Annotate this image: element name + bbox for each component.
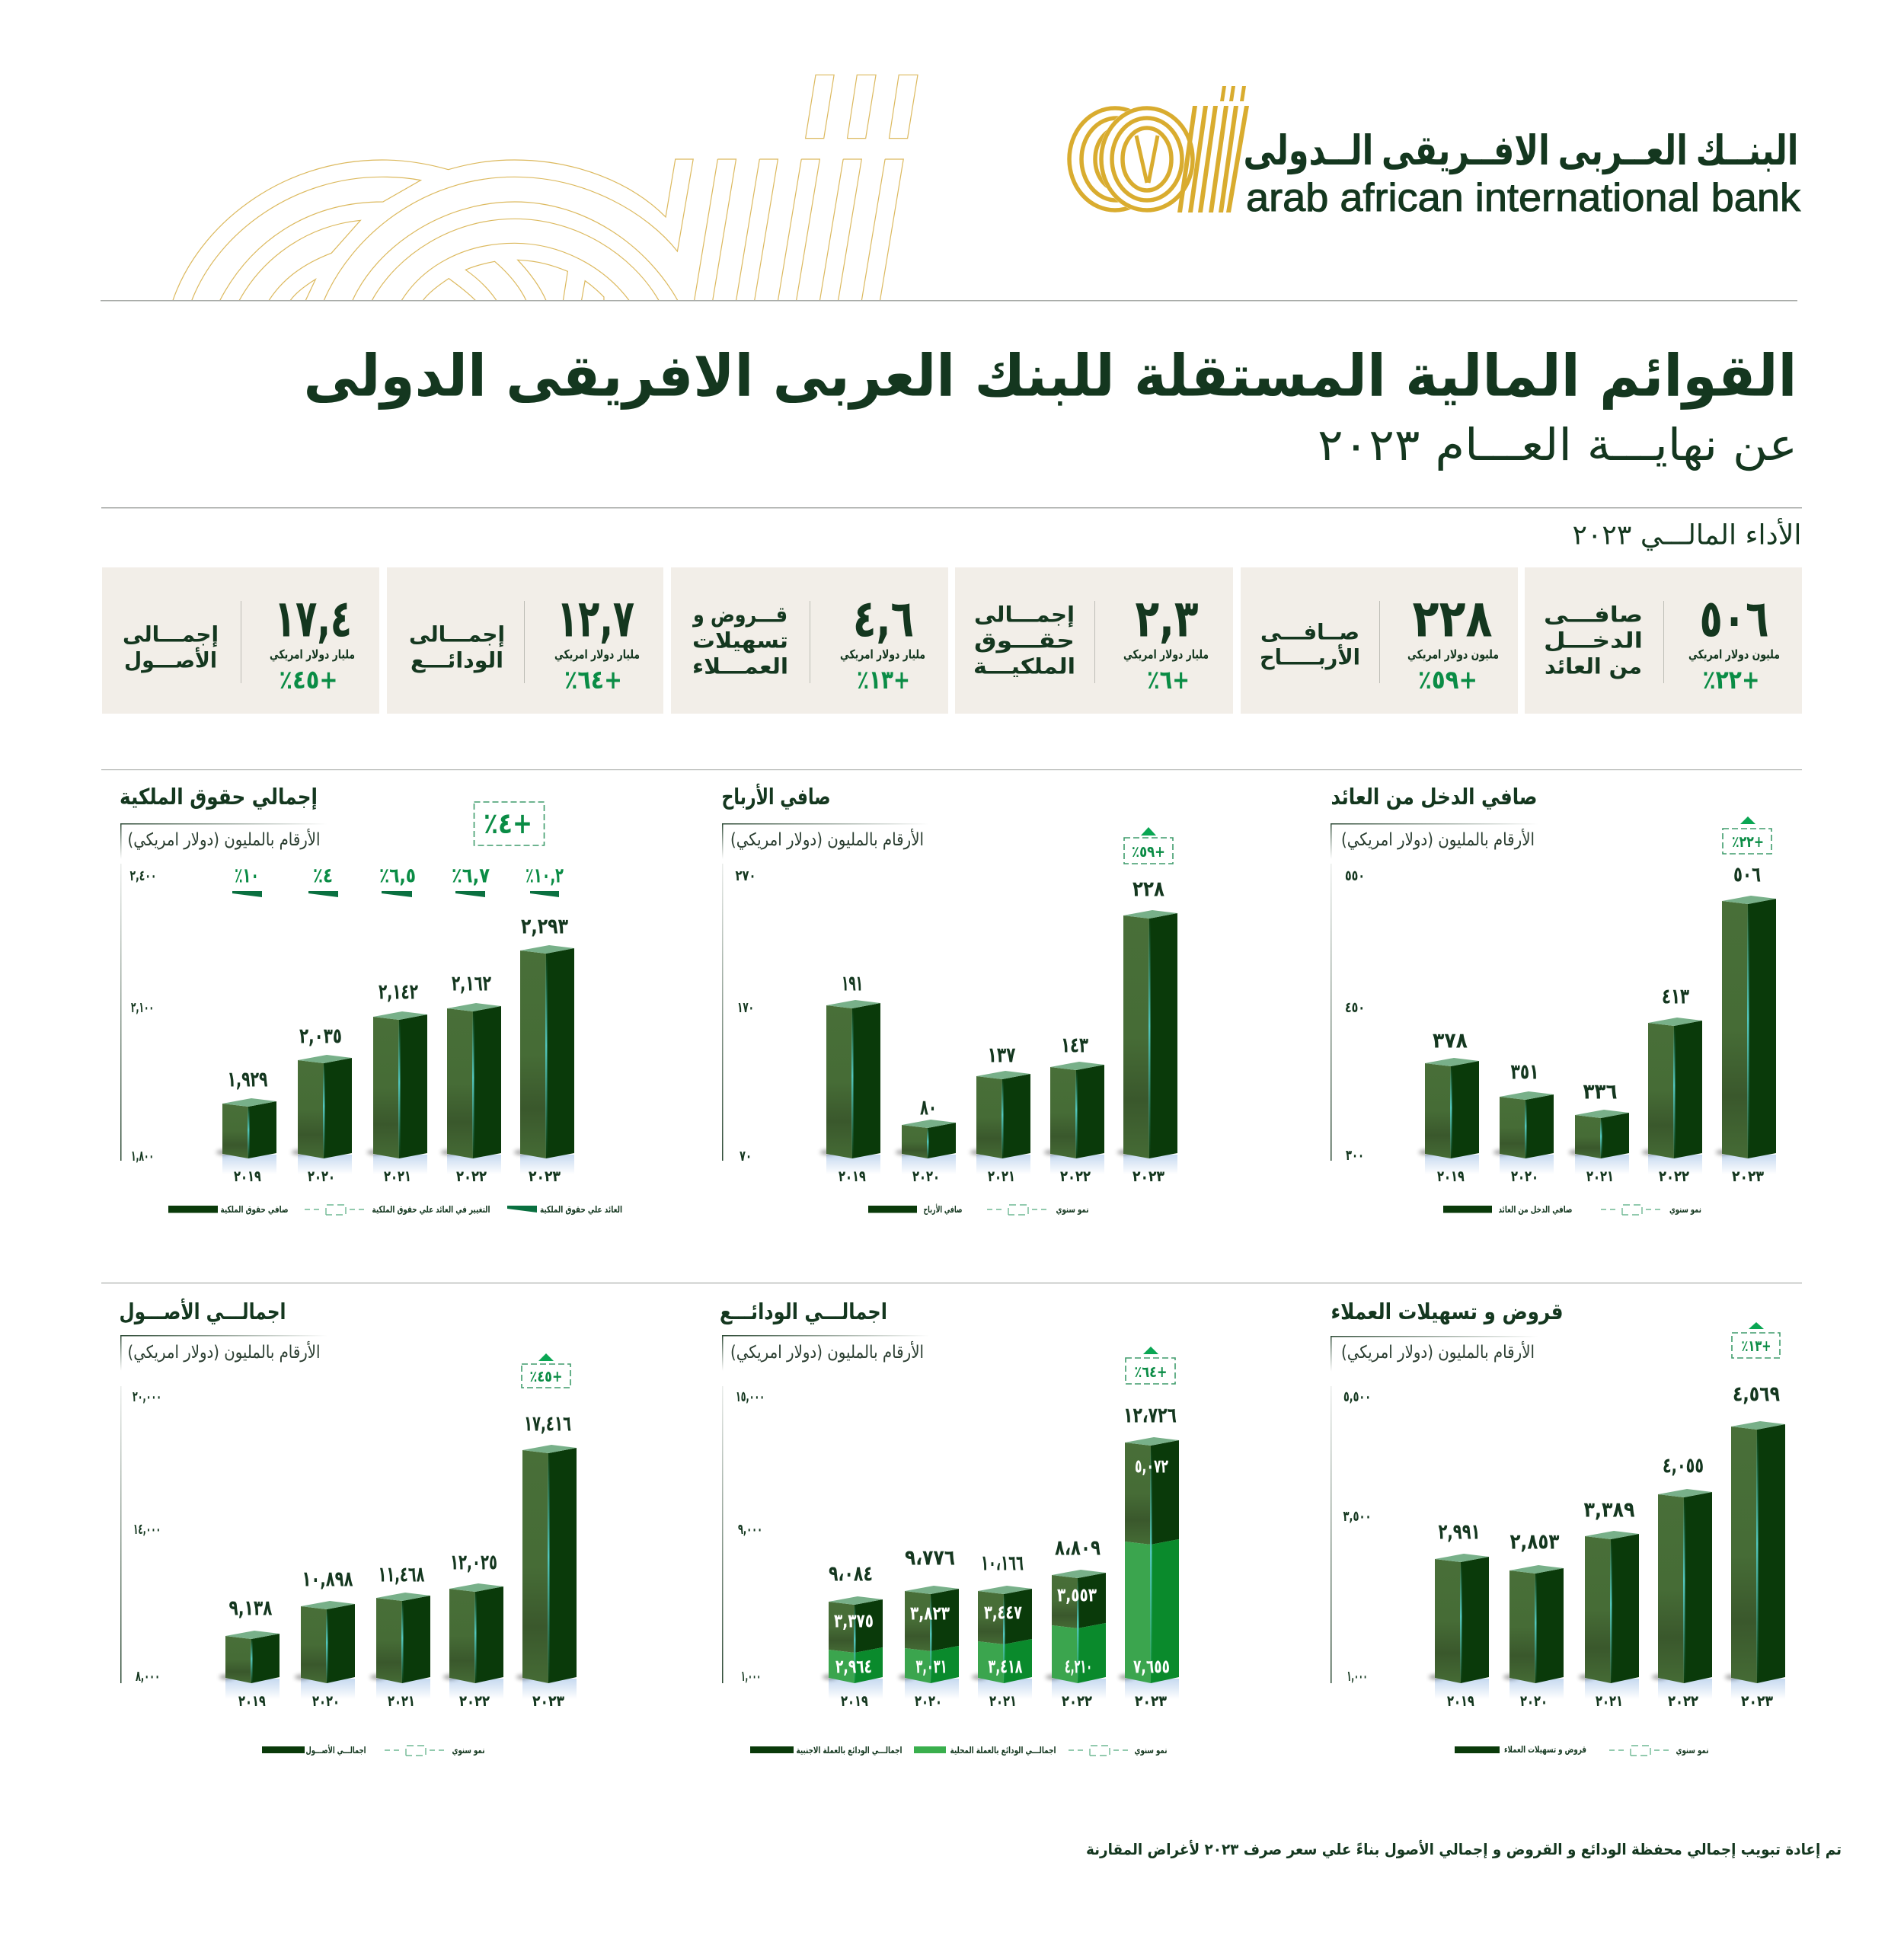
- value labels: ١٢,٠٢٥: [450, 1549, 497, 1575]
- year labels: [238, 1696, 564, 1706]
- growth callout: [522, 1353, 570, 1388]
- bars: [1429, 1421, 1785, 1699]
- year labels: ٢٠٢٢: [1060, 1168, 1091, 1187]
- legend: قروض و تسهيلات العملاء: [1504, 1744, 1586, 1756]
- value labels: ٤١٣: [1662, 984, 1689, 1008]
- year labels: ٢٠٢١: [1586, 1168, 1614, 1187]
- foreign currency value labels: ٣,٤٤٧: [984, 1601, 1022, 1624]
- kpi card: total deposits: [387, 567, 663, 714]
- y axis labels: ٥٥٠: [1345, 867, 1365, 884]
- local currency value labels: [835, 1656, 1170, 1677]
- growth callout: +٤٥٪: [530, 1367, 562, 1385]
- value labels: [842, 876, 1164, 1120]
- kpi card: customer loans: مليار دولار امريكي: [840, 647, 925, 663]
- legend: [262, 1744, 484, 1756]
- local currency value labels: ٣,٠٣١: [915, 1656, 947, 1677]
- year labels: ٢٠٢١: [388, 1692, 415, 1712]
- y axis labels: [129, 867, 157, 1165]
- kpi card: net profit: مليون دولار امريكي: [1407, 647, 1499, 663]
- value labels: ٤,٥٦٩: [1733, 1382, 1780, 1406]
- year labels: ٢٠٢٠: [912, 1168, 940, 1187]
- subtitle: عن نهايـــة العـــام ٢٠٢٣: [1318, 419, 1797, 471]
- panel: total deposits chart: [720, 1299, 1179, 1756]
- kpi card: customer loans: العمـــلاء: [692, 653, 788, 679]
- growth callout: [1126, 1347, 1175, 1384]
- year labels: ٢٠١٩: [841, 1692, 868, 1712]
- kpi card: net interest income: مليون دولار امريكي: [1688, 647, 1780, 663]
- year labels: ٢٠٢١: [1596, 1692, 1623, 1712]
- value labels: ٤,٠٥٥: [1663, 1453, 1704, 1478]
- unit note: الأرقام بالمليون (دولار امريكي): [128, 1341, 320, 1363]
- year labels: ٢٠٢٠: [1511, 1168, 1538, 1187]
- y axis labels: ١٧٠: [737, 999, 754, 1016]
- legend: نمو سنوي: [1676, 1745, 1709, 1756]
- chart frame: [1331, 823, 1538, 1161]
- kpi card: total equity: [955, 567, 1233, 714]
- value labels: ٣٥١: [1511, 1059, 1538, 1085]
- year labels: ٢٠١٩: [234, 1168, 261, 1187]
- kpi card: total equity: إجمـــالى: [974, 602, 1075, 628]
- y axis labels: ١٥,٠٠٠: [736, 1388, 765, 1405]
- total value labels: ٩،٠٨٤: [829, 1561, 873, 1586]
- unit note: الأرقام بالمليون (دولار امريكي): [128, 829, 320, 850]
- value labels: ٥٠٦: [1733, 862, 1761, 887]
- chart frame: [722, 823, 929, 1161]
- legend: نمو سنوي: [452, 1745, 484, 1756]
- year labels: ٢٠٢١: [988, 1168, 1015, 1187]
- value labels: [1438, 1382, 1780, 1554]
- legend: صافي الأرباح: [923, 1203, 963, 1215]
- panel: total assets chart: [119, 1298, 577, 1756]
- y axis labels: ١٤,٠٠٠: [133, 1521, 161, 1538]
- return on equity row: ١٠٪: [235, 864, 259, 888]
- logo mark: [1069, 86, 1249, 212]
- kpi card: customer loans: قـــروض و: [692, 602, 787, 628]
- value labels: ٩,١٣٨: [228, 1595, 273, 1621]
- bars: [216, 945, 574, 1174]
- y axis labels: [133, 1388, 161, 1685]
- value labels: ١٤٣: [1061, 1033, 1088, 1057]
- year labels: [1447, 1696, 1773, 1706]
- kpi card: total deposits: إجمـــالى: [409, 621, 505, 647]
- y axis labels: [1343, 1388, 1371, 1685]
- y axis labels: ٢,٤٠٠: [129, 867, 157, 884]
- value labels: ٢,٢٩٣: [521, 914, 568, 938]
- return on equity row: ٦,٥٪: [379, 864, 416, 888]
- growth callout: [1723, 816, 1771, 854]
- growth callout: +١٣٪: [1741, 1337, 1771, 1355]
- value labels: ١,٩٢٩: [227, 1066, 268, 1092]
- panel: kpi cards: [102, 567, 1802, 714]
- year labels: ٢٠٢٣: [1732, 1168, 1764, 1187]
- kpi card: total assets: ١٧,٤: [274, 589, 352, 649]
- kpi card: net interest income: [1525, 567, 1802, 714]
- year labels: ٢٠٢٠: [1520, 1692, 1548, 1712]
- unit note: الأرقام بالمليون (دولار امريكي): [1341, 829, 1535, 850]
- kpi card: customer loans: +١٣٪: [857, 665, 910, 695]
- chart title: قروض و تسهيلات العملاء: [1331, 1299, 1563, 1324]
- total value labels: [829, 1403, 1177, 1586]
- value labels: ٢,١٤٢: [379, 979, 418, 1004]
- chart frame: [1331, 1336, 1538, 1683]
- kpi card: customer loans: تسهيلات: [692, 628, 788, 653]
- kpi card: total equity: حقـــوق: [974, 628, 1075, 653]
- footnote: تم إعادة تبويب إجمالي محفظة الودائع و القروض و إجمالي الأصول بناءً علي سعر صرف ٢٠٢٣ لأغراض المقارنة: [1086, 1839, 1842, 1859]
- kpi card: total deposits: الودائـــع: [411, 647, 503, 673]
- kpi card: total equity: ٢,٣: [1135, 589, 1199, 649]
- growth callout: [1732, 1322, 1780, 1358]
- year labels: ٢٠٢٢: [456, 1168, 487, 1187]
- total value labels: ٩،٧٧٦: [905, 1545, 955, 1570]
- growth callout: +٢٢٪: [1732, 832, 1764, 851]
- year labels: ٢٠٢١: [989, 1692, 1017, 1712]
- section heading: financial performance: الأداء المالـــي ٢٠٢٣: [1572, 518, 1802, 551]
- year labels: [839, 1171, 1164, 1181]
- legend: التغيير في العائد علي حقوق الملكية: [372, 1204, 490, 1216]
- chart title: صافي الأرباح: [722, 783, 830, 810]
- kpi card: total deposits: ١٢,٧: [557, 589, 634, 649]
- logo: [1069, 86, 1801, 220]
- foreign currency value labels: ٣,٨٢٣: [910, 1602, 950, 1624]
- legend: [868, 1203, 1089, 1216]
- y axis labels: ٨,٠٠٠: [136, 1668, 160, 1685]
- value labels: [227, 914, 568, 1092]
- legend: نمو سنوي: [1056, 1204, 1089, 1216]
- legend: [1443, 1204, 1701, 1216]
- legend: [168, 1204, 622, 1216]
- kpi card: total equity: مليار دولار امريكي: [1123, 647, 1209, 663]
- growth callout: [1124, 827, 1173, 864]
- local currency value labels: ٢,٩٦٤: [835, 1656, 872, 1677]
- legend: اجمالـــي الودائع بالعملة الاجنبية: [797, 1745, 902, 1756]
- value labels: ٢,٩٩١: [1438, 1519, 1481, 1545]
- y axis labels: ٢٧٠: [736, 867, 756, 884]
- chart title: اجمالـــي الودائـــع: [720, 1299, 887, 1324]
- foreign currency value labels: [834, 1455, 1168, 1631]
- y axis labels: ٥,٥٠٠: [1343, 1388, 1371, 1405]
- year labels: ٢٠١٩: [238, 1692, 266, 1712]
- kpi card: net profit: ٢٢٨: [1412, 589, 1493, 649]
- y axis labels: ٧٠: [740, 1148, 752, 1165]
- y axis labels: ١,٠٠٠: [1347, 1668, 1368, 1685]
- kpi card: total assets: إجمـــالى: [123, 621, 219, 647]
- year labels: ٢٠٢٠: [915, 1692, 942, 1712]
- year labels: ٢٠٢٢: [1659, 1168, 1689, 1187]
- year labels: ٢٠٢٣: [1741, 1692, 1773, 1712]
- total value labels: ١٢،٧٢٦: [1123, 1403, 1177, 1427]
- chart frame: [120, 1335, 327, 1683]
- logo english name: arab african international bank: [1246, 176, 1801, 220]
- legend: [1455, 1744, 1709, 1756]
- kpi card: total assets: مليار دولار امريكي: [270, 647, 355, 663]
- kpi card: net interest income: من العائد: [1545, 653, 1642, 679]
- return on equity row: ١٠,٢٪: [526, 864, 564, 888]
- value labels: ١٠,٨٩٨: [302, 1566, 353, 1592]
- value labels: [228, 1411, 571, 1621]
- kpi card: total assets: +٤٥٪: [279, 665, 338, 695]
- return on equity row: ٤٪: [313, 864, 333, 888]
- year labels: ٢٠٢٠: [308, 1168, 335, 1187]
- kpi card: customer loans: [671, 567, 948, 714]
- value labels: ٣٣٦: [1583, 1078, 1618, 1104]
- value labels: ١٧,٤١٦: [524, 1411, 571, 1436]
- bars: [1419, 896, 1776, 1174]
- growth callout: +٤٪: [484, 807, 532, 840]
- kpi card: total assets: [102, 567, 379, 714]
- value labels: ٢,١٦٢: [452, 970, 491, 996]
- local currency value labels: ٣,٤١٨: [989, 1656, 1022, 1677]
- local currency value labels: ٤,٢١٠: [1065, 1656, 1092, 1677]
- year labels: ٢٠١٩: [1447, 1692, 1474, 1712]
- year labels: [234, 1171, 561, 1181]
- foreign currency value labels: ٥,٠٧٢: [1135, 1455, 1168, 1478]
- kpi card: net interest income: الدخـــل: [1544, 628, 1643, 653]
- stacked bars: [823, 1437, 1179, 1699]
- value labels: ٨٠: [920, 1095, 937, 1120]
- y axis labels: ٣٠٠: [1346, 1147, 1364, 1164]
- unit note: الأرقام بالمليون (دولار امريكي): [1341, 1341, 1535, 1363]
- year labels: ٢٠١٩: [1437, 1168, 1465, 1187]
- kpi card: total deposits: +٦٤٪: [564, 665, 622, 695]
- kpi card: total deposits: مليار دولار امريكي: [554, 647, 640, 663]
- legend: نمو سنوي: [1669, 1204, 1701, 1216]
- y axis labels: ٣,٥٠٠: [1343, 1508, 1371, 1525]
- chart frame: [722, 1335, 929, 1683]
- value labels: ١١,٤٦٨: [378, 1561, 425, 1587]
- year labels: ٢٠٢٣: [529, 1168, 561, 1187]
- kpi card: net profit: [1241, 567, 1518, 714]
- kpi card: net interest income: صافـــى: [1544, 602, 1643, 628]
- kpi card: net profit: الأربـــــاح: [1260, 644, 1360, 670]
- unit note: الأرقام بالمليون (دولار امريكي): [730, 829, 924, 850]
- year labels: ٢٠٢٢: [1668, 1692, 1698, 1712]
- return on equity row: ٦,٧٪: [452, 864, 490, 888]
- unit note: الأرقام بالمليون (دولار امريكي): [730, 1341, 924, 1363]
- legend: نمو سنوي: [1135, 1745, 1167, 1756]
- kpi card: total equity: +٦٪: [1147, 665, 1190, 695]
- local currency value labels: ٧,٦٥٥: [1133, 1656, 1170, 1677]
- value labels: [1433, 862, 1761, 1104]
- value labels: ٢,٠٣٥: [299, 1024, 342, 1048]
- panel: customer loans chart: [1331, 1299, 1785, 1756]
- total value labels: ١٠،١٦٦: [981, 1551, 1024, 1575]
- value labels: ٢,٨٥٣: [1509, 1529, 1560, 1554]
- total value labels: ٨،٨٠٩: [1055, 1535, 1101, 1560]
- year labels: ٢٠٢٣: [1132, 1168, 1164, 1187]
- growth callout: +٥٩٪: [1132, 842, 1165, 861]
- y axis labels: ٢٠,٠٠٠: [133, 1388, 161, 1405]
- y axis labels: ١,٠٠٠: [741, 1668, 761, 1685]
- value labels: ١٣٧: [987, 1042, 1016, 1068]
- legend: صافي حقوق الملكية: [221, 1204, 288, 1216]
- year labels: ٢٠٢٠: [312, 1692, 340, 1712]
- main title: القوائم المالية المستقلة للبنك العربى الافريقى الدولى: [303, 341, 1797, 410]
- legend: صافي الدخل من العائد: [1499, 1204, 1572, 1215]
- growth callout: [474, 802, 544, 845]
- decorative logo outline: [173, 75, 918, 301]
- y axis labels: [736, 1388, 765, 1685]
- value labels: ١٩١: [842, 970, 863, 996]
- year labels: [841, 1696, 1167, 1706]
- growth callout: +٦٤٪: [1135, 1363, 1167, 1381]
- y axis labels: [1345, 867, 1365, 1164]
- year labels: ٢٠٢٣: [532, 1692, 564, 1712]
- kpi card: net interest income: ٥٠٦: [1700, 589, 1768, 649]
- chart title: إجمالي حقوق الملكية: [120, 784, 318, 810]
- chart title: اجمالـــي الأصـــول: [119, 1298, 286, 1324]
- value labels: ٣٧٨: [1433, 1028, 1468, 1053]
- kpi card: net profit: صــافـــى: [1260, 620, 1359, 644]
- y axis labels: ٩,٠٠٠: [738, 1521, 762, 1538]
- legend: اجمالـــي الودائع بالعملة المحلية: [950, 1745, 1056, 1756]
- panel: net interest income chart: [1331, 784, 1776, 1216]
- kpi card: total equity: الملكيـــة: [973, 653, 1075, 679]
- kpi card: total assets: الأصـــول: [124, 647, 217, 673]
- y axis labels: ٤٥٠: [1345, 999, 1365, 1016]
- year labels: ٢٠٢٢: [1062, 1692, 1092, 1712]
- foreign currency value labels: ٣,٣٧٥: [834, 1610, 874, 1631]
- year labels: ٢٠٢٢: [459, 1692, 490, 1712]
- return on equity row: [232, 864, 564, 897]
- y axis labels: [736, 867, 756, 1165]
- panel: net profit chart: [722, 783, 1177, 1216]
- legend: اجمالـــي الأصـــول: [306, 1744, 366, 1756]
- chart frame: [120, 823, 327, 1161]
- year labels: ٢٠١٩: [839, 1168, 866, 1187]
- bars: [219, 1445, 577, 1699]
- legend: [750, 1745, 1167, 1756]
- panel: total equity chart: [120, 784, 622, 1216]
- y axis labels: ١,٨٠٠: [131, 1148, 154, 1165]
- kpi card: net interest income: +٢٢٪: [1703, 665, 1759, 695]
- value labels: ٣,٣٨٩: [1584, 1497, 1634, 1522]
- kpi card: net profit: +٥٩٪: [1418, 665, 1478, 695]
- y axis labels: ٢,١٠٠: [131, 999, 154, 1016]
- kpi card: customer loans: ٤,٦: [853, 589, 914, 649]
- chart title: صافي الدخل من العائد: [1331, 784, 1537, 810]
- legend: العائد علي حقوق الملكية: [540, 1204, 622, 1216]
- bars: [820, 910, 1177, 1174]
- year labels: [1437, 1171, 1764, 1181]
- year labels: ٢٠٢١: [384, 1168, 411, 1187]
- year labels: ٢٠٢٣: [1135, 1692, 1167, 1712]
- value labels: ٢٢٨: [1132, 876, 1164, 902]
- foreign currency value labels: ٣,٥٥٣: [1057, 1584, 1097, 1606]
